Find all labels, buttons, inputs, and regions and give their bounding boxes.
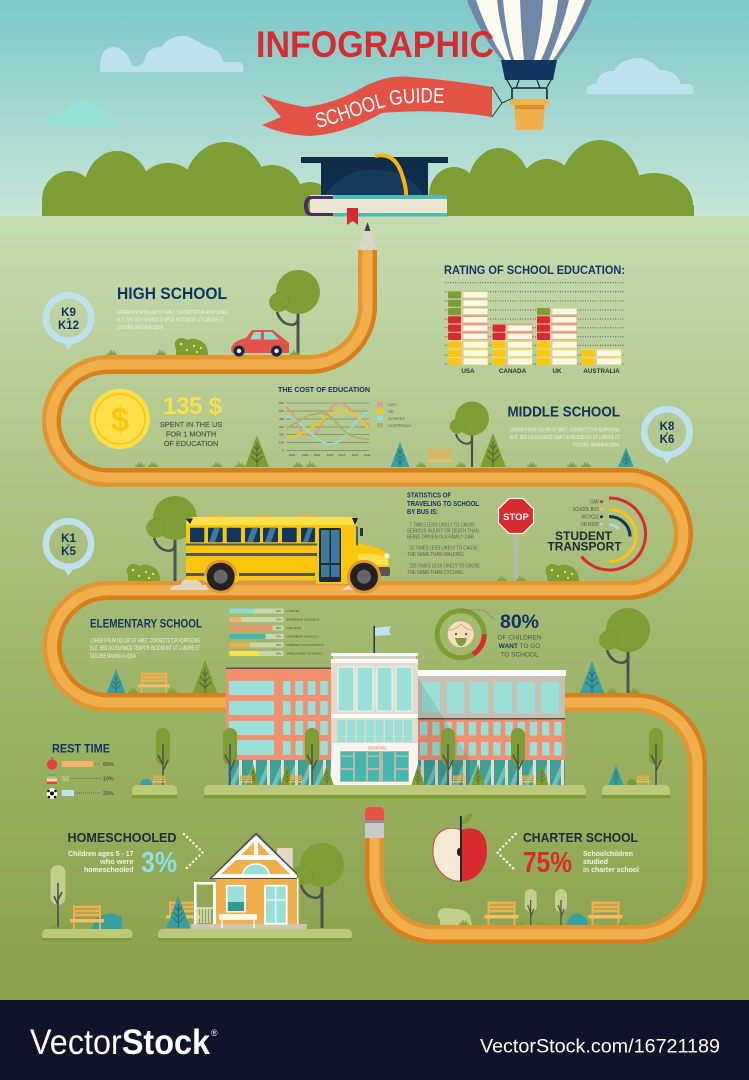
- school building: [226, 653, 566, 785]
- banner: school guide: [262, 76, 512, 136]
- bench middle row: [427, 449, 453, 467]
- cost of education chart: 600: [279, 401, 284, 405]
- title: INFOGRAPHIC: [256, 23, 494, 65]
- grass row 2: [135, 461, 591, 467]
- cost of education chart: [278, 385, 411, 457]
- 80 percent text: [497, 611, 542, 658]
- high school text: LOREM IPSUM DOLOR SIT AMET, CONSECTETUR ADIPISCING: [117, 310, 227, 316]
- middle school text: [510, 428, 620, 448]
- stop sign: [498, 498, 534, 581]
- cost of education chart: THE COST OF EDUCATION: [278, 385, 370, 394]
- cost of education chart: 2015: [352, 453, 359, 457]
- pencil road: [44, 250, 704, 942]
- grass row 4: [607, 687, 639, 693]
- badge K8 K6: -: [666, 428, 669, 437]
- apple: [433, 813, 487, 882]
- rest time: 65%: [103, 762, 114, 768]
- graduation cap on book: [301, 155, 448, 225]
- cost of education chart: 400: [279, 417, 284, 421]
- homeschooled text: who were: [99, 857, 134, 866]
- school types bar chart: GRAMMAR SCHOOLS: [286, 634, 319, 638]
- travel statistics: - 228 TIMES LESS LIKELY TO CAUSE: [407, 564, 480, 570]
- 80 percent text: OF CHILDREN: [497, 634, 542, 642]
- school types bar chart: LYCEUM: [286, 609, 300, 613]
- student transport chart: SCHOOL BUS: [572, 507, 599, 513]
- charter text: [583, 849, 639, 874]
- pencil tip: [358, 222, 377, 250]
- badge K1 K5: -: [67, 540, 70, 549]
- elementary school text: [90, 638, 200, 660]
- bush: [175, 338, 208, 355]
- rest time: [47, 744, 114, 799]
- cost of education chart: AUSTRALIA: [388, 423, 411, 428]
- travel statistics: [407, 492, 480, 576]
- bush transport: [546, 564, 579, 581]
- stop sign: STOP: [503, 512, 530, 523]
- school types bar chart: 70%: [276, 634, 282, 638]
- tree bus row: [146, 496, 197, 581]
- background sky: [0, 0, 749, 216]
- cost of education chart: 2010: [339, 453, 346, 457]
- coin icon: [90, 389, 150, 449]
- school front trees and benches: [223, 728, 549, 785]
- high school text: ELIT, SED DO EIUSMOD TEMPOR INCIDIDUNT UT LABORE ET: [117, 318, 224, 324]
- car: [231, 330, 289, 356]
- hot air balloon: [467, 0, 592, 130]
- coin icon: $: [111, 401, 129, 438]
- cost of education chart: 1995: [302, 453, 309, 457]
- student transport chart: TRANSPORT: [548, 540, 622, 554]
- middle school text: DOLORE MAGNA ALIQUA.: [573, 442, 620, 448]
- high school heading: HIGH SCHOOL: [117, 285, 227, 303]
- cost of education chart: 2005: [327, 453, 334, 457]
- cost of education chart: 2020: [364, 453, 371, 457]
- badge K9 K12: K12: [58, 320, 79, 332]
- cost of education chart: USA: [388, 402, 397, 407]
- badge K8 K6: [644, 409, 690, 464]
- student transport chart: CAR: [590, 500, 599, 506]
- badge K9 K12: [46, 295, 91, 350]
- travel statistics: BY BUS IS:: [407, 509, 438, 516]
- high school text: [117, 310, 227, 331]
- travel statistics: THE SAME THAN WALKING.: [407, 552, 465, 558]
- charter school heading: CHARTER SCHOOL: [523, 830, 638, 845]
- travel statistics: BEING DRIVEN IN A FAMILY CAR.: [407, 534, 475, 540]
- middle school text: LOREM IPSUM DOLOR SIT AMET, CONSECTETUR ADIPISCING: [510, 428, 620, 434]
- cost of education chart: 100: [279, 440, 284, 444]
- dotted chevron left: [497, 834, 516, 871]
- rest time: REST TIME: [52, 744, 110, 756]
- student transport chart: ON FOOT: [580, 522, 599, 528]
- footer url: VectorStock.com/16721189: [480, 1036, 720, 1058]
- rating chart: RATING OF SCHOOL EDUCATION:: [444, 265, 625, 277]
- middle school heading: MIDDLE SCHOOL: [508, 404, 620, 420]
- school types bar chart: [230, 608, 323, 656]
- ground: [0, 216, 749, 1000]
- spent text: SPENT IN THE US: [160, 420, 222, 429]
- badge K1 K5: K1: [61, 533, 76, 545]
- charter text: in charter school: [583, 865, 639, 874]
- school building: SCHOOL: [368, 746, 387, 750]
- cost of education chart: 1990: [289, 453, 296, 457]
- rating chart: USA: [461, 368, 475, 375]
- school types bar chart: 46%: [276, 609, 282, 613]
- elementary school text: LOREM IPSUM DOLOR SIT AMET, CONSECTETUR ADIPISCING: [90, 638, 200, 644]
- cost of education chart: UK: [388, 409, 394, 414]
- badge K9 K12: K9: [61, 307, 76, 319]
- cost of education chart: 2000: [314, 453, 321, 457]
- high school text: DOLORE MAGNA ALIQUA.: [117, 325, 164, 331]
- school types bar chart: 35%: [276, 643, 282, 647]
- 75 percent: 75%: [523, 847, 572, 879]
- badge K1 K5: [46, 521, 91, 576]
- elementary school heading: ELEMENTARY SCHOOL: [90, 618, 202, 630]
- school types bar chart: COLLEGE: [286, 626, 301, 630]
- travel statistics: - 7 TIMES LESS LIKELY TO CAUSE: [407, 522, 475, 528]
- rating chart: AUSTRALIA: [583, 368, 620, 375]
- ground platform main: [204, 785, 586, 798]
- school types bar chart: BOARDING SCHOOLS: [286, 618, 319, 622]
- footer registered mark: ®: [211, 1028, 218, 1038]
- tree middle school: [450, 402, 489, 467]
- hills right: [429, 140, 694, 250]
- student transport chart: BICYCLE: [582, 514, 599, 520]
- cost of education chart: 500: [279, 409, 284, 413]
- charter text: studied: [583, 857, 608, 866]
- school types bar chart: SPECIALIZED SCHOOLS: [286, 652, 323, 656]
- rest time: 10%: [103, 776, 114, 782]
- conifer right: [580, 661, 604, 693]
- dotted chevron right: [184, 834, 203, 871]
- school bus: [186, 516, 390, 594]
- 80 percent ring: [437, 610, 495, 658]
- badge K8 K6: K8: [660, 421, 675, 433]
- right park: [609, 728, 663, 785]
- left park: [140, 728, 170, 785]
- conifers middle row: [245, 433, 634, 467]
- school types bar chart: 15%: [276, 618, 282, 622]
- grass row 1: [107, 349, 300, 355]
- travel statistics: TRAVELING TO SCHOOL: [407, 501, 480, 508]
- cloud teal: [43, 100, 119, 125]
- badge K1 K5: K5: [61, 546, 76, 558]
- hills left: [42, 142, 330, 242]
- rating chart: [444, 265, 625, 375]
- travel statistics: SERIOUS INJURY OR DEATH THAN: [407, 528, 479, 534]
- student transport chart: [548, 498, 646, 570]
- footer bar: [0, 1000, 749, 1080]
- 80 percent text: WANT TO GO: [499, 643, 540, 650]
- elementary school text: DOLORE MAGNA ALIQUA.: [90, 653, 137, 660]
- home park left: [42, 865, 132, 940]
- cloud right: [586, 58, 694, 94]
- tree elementary right: [600, 608, 650, 693]
- rating chart: UK: [552, 368, 562, 375]
- badge K8 K6: K6: [660, 434, 674, 446]
- house: [166, 832, 307, 929]
- homeschooled text: homeschooled: [84, 865, 134, 874]
- flag: [374, 626, 391, 654]
- homeschooled heading: HOMESCHOOLED: [68, 830, 176, 845]
- homeschooled text: [68, 849, 134, 874]
- 3 percent: 3%: [141, 847, 177, 879]
- spent text: [160, 420, 222, 448]
- cost of education chart: 0: [282, 448, 284, 452]
- charter text: Schoolchildren: [583, 849, 633, 858]
- rest time: 25%: [103, 791, 114, 797]
- banner: school guide: SCHOOL GUIDE: [316, 88, 444, 128]
- travel statistics: THE SAME THAN CYCLING.: [407, 570, 464, 576]
- school types bar chart: 80%: [276, 626, 282, 630]
- bush bus row: [127, 564, 160, 581]
- 80 percent text: 80%: [500, 611, 539, 633]
- cloud left: [100, 36, 244, 72]
- tree high school: [270, 270, 320, 355]
- travel statistics: - 31 TIMES LESS LIKELY TO CAUSE: [407, 546, 478, 552]
- bus dust: [170, 578, 362, 590]
- school types bar chart: 50%: [276, 652, 282, 656]
- 80 percent text: TO SCHOOL: [500, 652, 539, 658]
- home platform: [158, 929, 352, 940]
- grass row 3: [497, 575, 526, 581]
- tree home: [294, 843, 344, 928]
- badge K9 K12: -: [67, 314, 70, 323]
- spent text: OF EDUCATION: [164, 439, 218, 448]
- cost of education chart: 200: [279, 432, 284, 436]
- school types bar chart: CORRECTION SCHOOLS: [286, 643, 323, 647]
- ground platform right: [602, 785, 670, 798]
- pencil eraser: [365, 807, 384, 838]
- cost of education chart: CANADA: [388, 416, 406, 421]
- student transport chart: STUDENT: [555, 529, 613, 543]
- cost of education chart: 300: [279, 425, 284, 429]
- rating chart: CANADA: [499, 368, 527, 375]
- elementary school text: ELIT, SED DO EIUSMOD TEMPOR INCIDIDUNT UT LABORE ET: [90, 645, 200, 652]
- footer logo: VectorStock: [30, 1023, 210, 1062]
- spent text: FOR 1 MONTH: [166, 430, 216, 438]
- travel statistics: STATISTICS OF: [407, 492, 452, 500]
- elementary row trees and bench: [107, 660, 217, 693]
- charter park: [438, 889, 628, 925]
- middle school text: ELIT, SED DO EIUSMOD TEMPOR INCIDIDUNT UT LABORE ET: [510, 435, 620, 441]
- homeschooled text: Children ages 5 - 17: [68, 849, 134, 858]
- ground platform left: [132, 785, 177, 798]
- 135 dollars: 135 $: [163, 393, 223, 420]
